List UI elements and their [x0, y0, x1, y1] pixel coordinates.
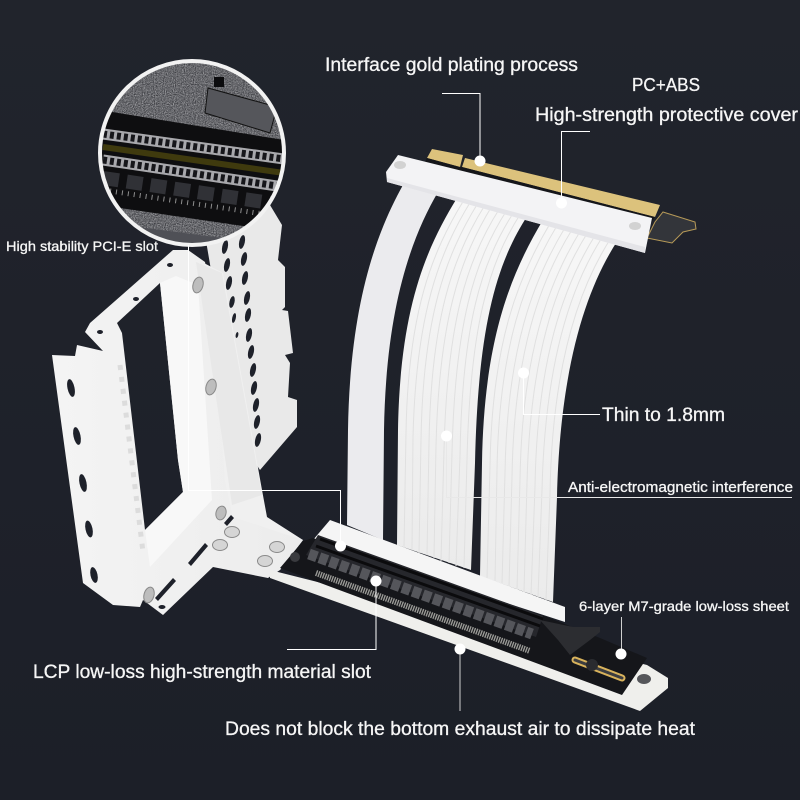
contact blocks [103, 178, 284, 205]
zoomed detail circle [100, 60, 284, 250]
black circuit board [280, 538, 647, 695]
gold slot [575, 660, 622, 678]
white connector cover [313, 520, 565, 622]
bottom connector board [270, 520, 668, 711]
plain white ribbon cable [347, 185, 438, 540]
leader: gold plating [442, 94, 486, 166]
leader: PCI-E slot [188, 245, 346, 552]
bracket arm shading [196, 262, 262, 505]
ribbed white ribbon cable right [480, 220, 618, 602]
contact tab [647, 212, 696, 243]
label: PCI-E slot: High stability PCI-E slot [6, 238, 158, 254]
cut-out panel [205, 88, 277, 133]
lower surface [142, 228, 222, 243]
bracket shaded inner flange [145, 276, 212, 567]
label: gold plating: Interface gold plating process [325, 55, 578, 76]
black strip under fingers [425, 158, 655, 222]
label: anti-electromagnetic: Anti-electromagnetic interference [568, 480, 793, 496]
ribbed white ribbon cable centre [397, 198, 528, 570]
pin row [110, 191, 270, 215]
leader: anti-electromagnetic [441, 430, 792, 498]
slot body [306, 535, 543, 637]
bracket rear perforated plate [205, 205, 297, 470]
protective cover [386, 155, 652, 253]
textured metal surface [112, 63, 281, 238]
bracket screws [142, 276, 284, 604]
slot contact rows [103, 134, 284, 187]
left screw [290, 552, 300, 562]
vertical mounting bracket [52, 205, 303, 615]
label: 6-layer sheet: 6-layer M7-grade low-loss sheet [579, 598, 789, 614]
plate hole [637, 674, 651, 684]
label: thin: Thin to 1.8mm [602, 405, 725, 426]
dark channel [100, 110, 284, 232]
slot contact rows [316, 539, 543, 626]
label: LCP slot: LCP low-loss high-strength material slot [33, 662, 372, 683]
bracket central arm [188, 250, 303, 570]
bracket front frame [52, 250, 303, 615]
leader: protective cover [556, 132, 590, 208]
bracket perforation row [120, 365, 143, 552]
bracket slots and holes [66, 263, 234, 609]
leader: LCP slot [287, 576, 382, 650]
label: protective cover: High-strength protective cover [535, 105, 799, 126]
slot teeth [309, 554, 532, 634]
label: PC+ABS: PC+ABS [632, 75, 700, 95]
leader: 6-layer sheet [616, 617, 626, 660]
leader: exhaust air [454, 644, 466, 711]
gold fingers [427, 149, 660, 217]
latch [540, 620, 600, 655]
top connector with gold fingers [386, 149, 696, 253]
label: exhaust air: Does not block the bottom exhaust air to dissipate heat [225, 719, 696, 740]
board screw [586, 659, 598, 671]
circle white border [100, 61, 284, 245]
leader: thin to 1.8mm [518, 368, 600, 414]
gold pin row [316, 573, 530, 651]
white base plate [270, 570, 668, 711]
